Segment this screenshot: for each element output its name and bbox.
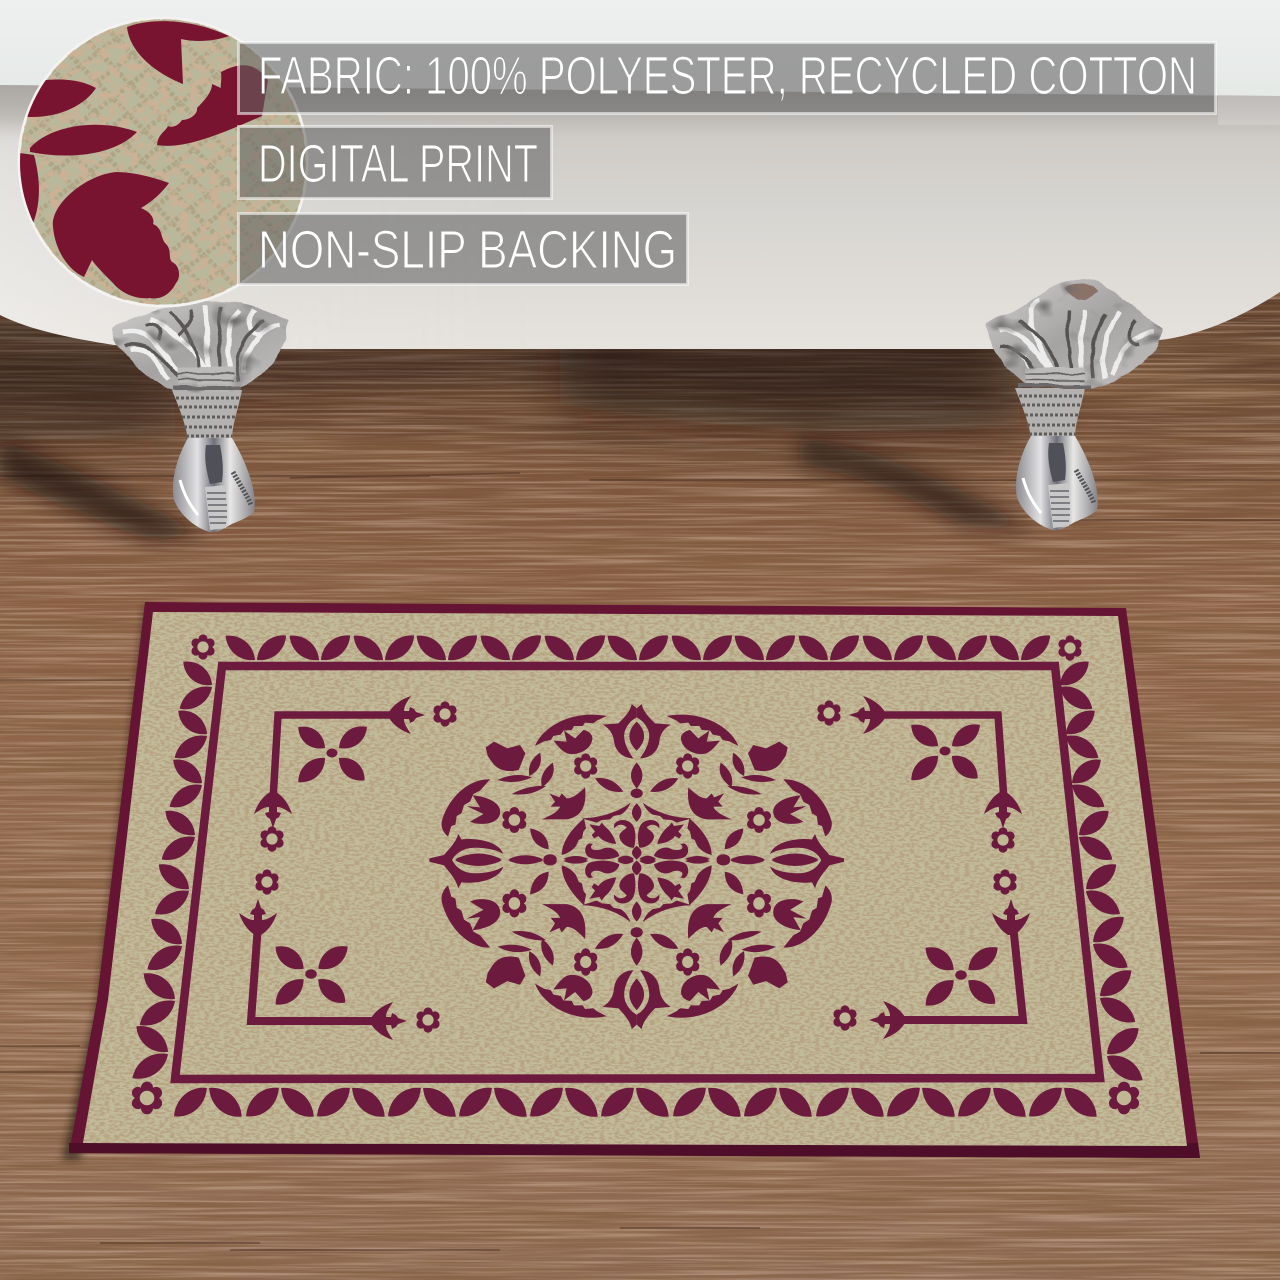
background wall (0, 0, 1280, 110)
right leaf border (1055, 655, 1148, 1088)
top-left corner bracket (254, 696, 457, 852)
bathtub body (0, 85, 1280, 370)
rug printed pattern (127, 629, 1148, 1124)
fabric detail circle (15, 18, 308, 308)
bottom-right corner bracket (833, 869, 1030, 1039)
top-right corner bracket (817, 696, 1022, 853)
central medallion (429, 704, 844, 1029)
rug shadow (62, 604, 155, 1160)
right claw foot (986, 279, 1164, 530)
top leaf border (220, 629, 1055, 666)
feature label: non-slip backing (238, 214, 688, 284)
feature label: non-slip backing: NON-SLIP BACKING (258, 220, 677, 280)
bottom-left corner bracket (239, 869, 440, 1040)
left leaf border (127, 655, 217, 1086)
feature label: digital print: DIGITAL PRINT (258, 134, 538, 194)
rug field (83, 612, 1187, 1146)
corner flowers (132, 634, 1139, 1114)
feature label: digital print (238, 126, 552, 198)
rug (62, 600, 1200, 1160)
wooden floor (0, 280, 1280, 1280)
outer frame line (175, 666, 1100, 1079)
left claw foot (112, 300, 288, 532)
bottom leaf border (168, 1081, 1103, 1124)
rug binding edge (69, 602, 1200, 1158)
